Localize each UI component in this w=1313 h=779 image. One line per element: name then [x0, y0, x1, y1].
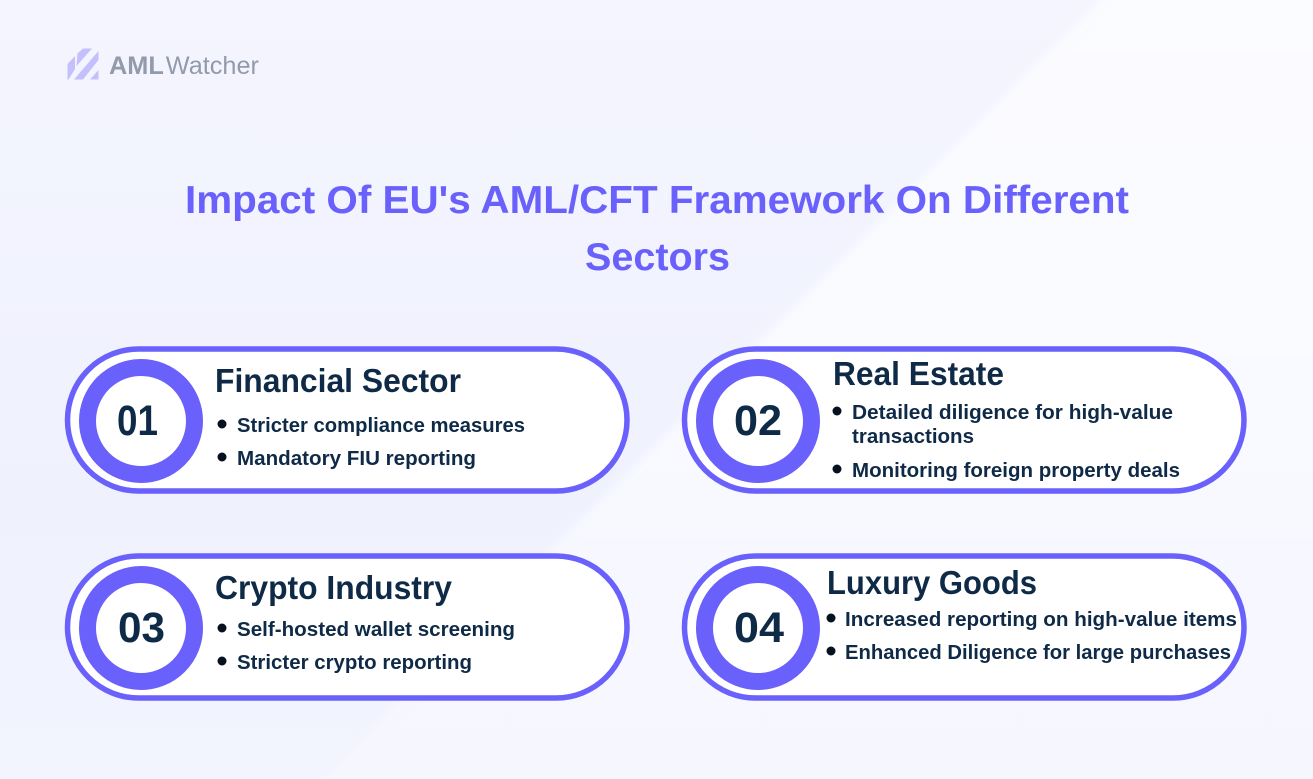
number badge 01: 01: [117, 398, 158, 445]
heading: Luxury Goods: Luxury Goods: [827, 564, 1037, 601]
bullet list: [218, 414, 525, 470]
logo wordmark: AMLWatcher: [109, 52, 259, 80]
panel: 01 Financial Sector: [68, 349, 627, 491]
heading: Real Estate: Real Estate: [833, 355, 1004, 392]
title: [185, 179, 1129, 279]
number badge 03: [88, 574, 194, 682]
heading: Crypto Industry: Crypto Industry: [215, 569, 453, 606]
number badge 03: 03: [118, 605, 165, 652]
bullet list: Detailed diligence for high-value: [852, 401, 1173, 424]
bullet list: Monitoring foreign property deals: [852, 459, 1180, 482]
number badge 02: [704, 368, 812, 474]
bullet list: Enhanced Diligence for large purchases: [845, 641, 1231, 664]
number badge 01: [88, 368, 194, 474]
logo: AML Watcher: [68, 48, 259, 80]
panel: 04 Luxury Goods: [684, 556, 1244, 698]
bullet list: Stricter crypto reporting: [237, 651, 472, 674]
panel: 02 Real Estate: [684, 349, 1244, 491]
bullet list: [832, 401, 1180, 482]
bullet list: Increased reporting on high-value items: [845, 608, 1237, 631]
icon: striped logo mark: [68, 48, 98, 80]
bullet list: Stricter compliance measures: [237, 414, 525, 437]
bullet list: Mandatory FIU reporting: [237, 447, 476, 470]
number badge 04: [704, 574, 812, 682]
bullet list: [218, 618, 515, 674]
heading: Financial Sector: Financial Sector: [215, 362, 461, 399]
panel: 03 Crypto Industry: [68, 556, 627, 698]
bullet list: Self-hosted wallet screening: [237, 618, 515, 641]
bullet list: [826, 608, 1237, 664]
title: Impact Of EU's AML/CFT Framework On Different: [185, 179, 1129, 222]
number badge 04: 04: [734, 605, 784, 652]
title: Sectors: [585, 236, 730, 279]
number badge 02: 02: [734, 398, 782, 445]
bullet list: transactions: [852, 425, 974, 448]
